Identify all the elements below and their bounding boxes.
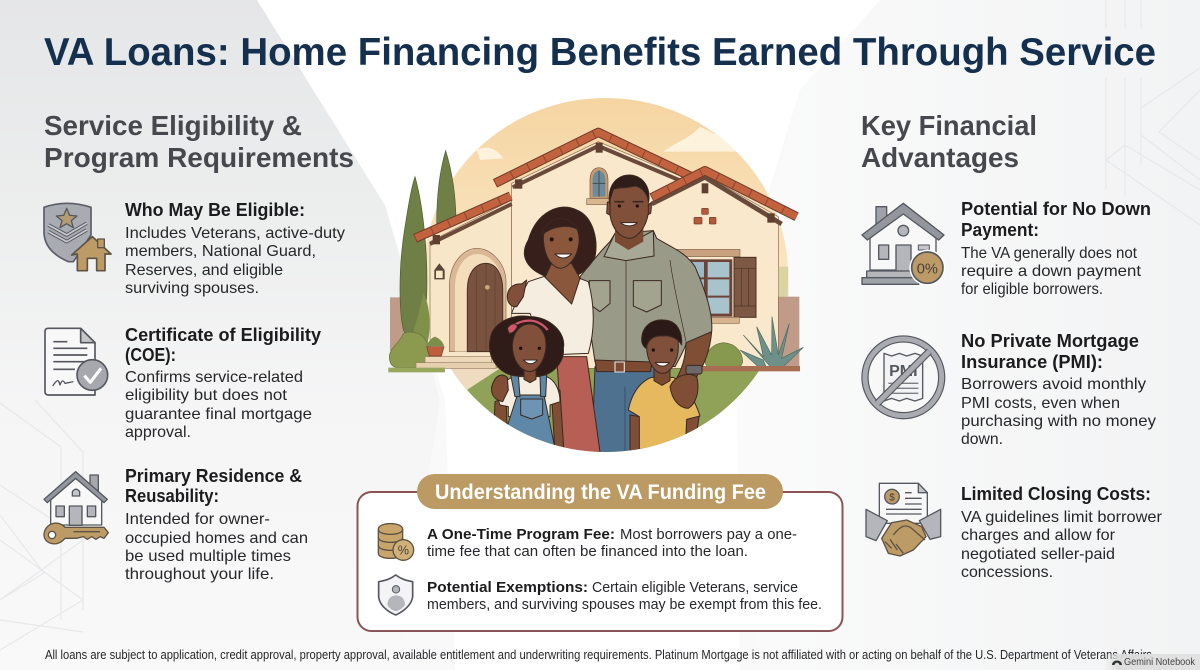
item: certificate of eligibility: Certificate of Eligibility bbox=[125, 325, 321, 345]
wall lantern bbox=[434, 263, 445, 279]
item: limited closing costs: concessions. bbox=[961, 564, 1053, 581]
heading: right column: Advantages bbox=[861, 142, 1019, 173]
heading pill bbox=[417, 474, 783, 509]
vent bricks bbox=[694, 208, 716, 224]
panel: understanding the VA funding fee bbox=[358, 474, 842, 631]
icon: house and key bbox=[44, 472, 108, 544]
item: certificate of eligibility: (COE): bbox=[125, 345, 176, 365]
arched door bbox=[449, 248, 506, 352]
icon: shield with person bbox=[379, 575, 413, 615]
item: certificate of eligibility: eligibility but does not bbox=[125, 387, 288, 404]
item: no private mortgage insurance: Insurance (PMI): bbox=[961, 352, 1103, 372]
item: primary residence and reusability: Intended for owner- bbox=[125, 511, 270, 528]
item: primary residence and reusability: throughout your life. bbox=[125, 566, 274, 583]
item: who may be eligible: Reserves, and eligible bbox=[125, 262, 283, 279]
front window bbox=[677, 249, 756, 323]
sky circle bbox=[413, 97, 797, 457]
item: limited closing costs: negotiated seller-paid bbox=[961, 546, 1115, 563]
item: who may be eligible bbox=[44, 200, 345, 297]
item: primary residence and reusability bbox=[44, 466, 308, 583]
panel: key financial advantages bbox=[861, 110, 1163, 581]
icon: crossed out PMI receipt: PMI bbox=[889, 363, 918, 380]
icon: handshake and document bbox=[866, 483, 941, 556]
item: no private mortgage insurance bbox=[865, 331, 1156, 448]
item: potential exemptions: Potential Exemptions: bbox=[427, 579, 588, 596]
cypress trees bbox=[400, 151, 456, 335]
item: potential exemptions: members, and surviving spouses may be exempt from this fee. bbox=[427, 596, 822, 613]
item: no private mortgage insurance: purchasing with no money bbox=[961, 413, 1156, 430]
item: one-time program fee bbox=[378, 524, 797, 560]
item: certificate of eligibility: guarantee final mortgage bbox=[125, 406, 312, 423]
item: potential for no down payment: require a down payment bbox=[961, 263, 1142, 280]
panel: service eligibility and program requirements bbox=[44, 110, 354, 583]
icon: crossed out PMI receipt bbox=[865, 339, 942, 416]
item: no private mortgage insurance: No Private Mortgage bbox=[961, 331, 1139, 351]
item: potential exemptions: Certain eligible Veterans, service bbox=[592, 579, 798, 596]
item: certificate of eligibility bbox=[45, 325, 321, 441]
item: limited closing costs bbox=[866, 483, 1163, 581]
icon: house with zero percent badge bbox=[862, 203, 945, 286]
watermark: Gemini Notebook bbox=[1104, 654, 1200, 670]
heading pill: Understanding the VA Funding Fee bbox=[435, 481, 766, 504]
attic window bbox=[587, 168, 612, 205]
icon: military shield and home bbox=[44, 203, 111, 271]
icon: handshake and document: $ bbox=[889, 492, 895, 503]
fences bbox=[390, 297, 799, 367]
item: potential for no down payment: Potential for No Down bbox=[961, 199, 1151, 219]
item: potential for no down payment: Payment: bbox=[961, 220, 1039, 240]
shrubs and pot bbox=[389, 267, 788, 368]
item: primary residence and reusability: occupied homes and can bbox=[125, 530, 308, 547]
item: primary residence and reusability: Reusability: bbox=[125, 486, 219, 506]
girl bbox=[489, 316, 564, 453]
heading: left column: Service Eligibility & bbox=[44, 110, 302, 141]
family bbox=[489, 175, 712, 457]
item: limited closing costs: Limited Closing Costs: bbox=[961, 484, 1151, 504]
heading: left column: Program Requirements bbox=[44, 142, 354, 173]
title: VA Loans: Home Financing Benefits Earned Through Service bbox=[44, 31, 1156, 74]
icon: coins with percent bbox=[378, 524, 414, 560]
item: who may be eligible: Includes Veterans, active-duty bbox=[125, 225, 345, 242]
roofs bbox=[415, 132, 797, 244]
watermark: Gemini Notebook: Gemini Notebook bbox=[1124, 657, 1196, 668]
item: who may be eligible: members, National Guard, bbox=[125, 243, 316, 260]
mother bbox=[507, 207, 601, 457]
house walls bbox=[430, 200, 512, 363]
heading: right column bbox=[861, 110, 1037, 173]
item: limited closing costs: VA guidelines limit borrower bbox=[961, 509, 1163, 526]
item: no private mortgage insurance: down. bbox=[961, 431, 1003, 448]
heading: left column bbox=[44, 110, 354, 173]
item: potential for no down payment: for eligible borrowers. bbox=[961, 281, 1103, 298]
item: who may be eligible: surviving spouses. bbox=[125, 280, 259, 297]
item: primary residence and reusability: Primary Residence & bbox=[125, 466, 302, 486]
item: potential for no down payment bbox=[862, 199, 1151, 298]
item: certificate of eligibility: approval. bbox=[125, 424, 191, 441]
item: one-time program fee: A One-Time Program Fee: bbox=[427, 526, 615, 543]
icon: document with check mark bbox=[45, 328, 108, 395]
illustration: family in front of home bbox=[388, 97, 803, 457]
heading: right column: Key Financial bbox=[861, 110, 1037, 141]
item: potential exemptions bbox=[379, 575, 822, 615]
item: primary residence and reusability: be used multiple times bbox=[125, 548, 291, 565]
icon: house with zero percent badge: 0% bbox=[917, 261, 938, 277]
item: certificate of eligibility: Confirms service-related bbox=[125, 369, 303, 386]
item: one-time program fee: Most borrowers pay a one- bbox=[620, 526, 797, 543]
icon: coins with percent: % bbox=[398, 544, 409, 558]
item: limited closing costs: charges and allow for bbox=[961, 527, 1116, 544]
item: potential for no down payment: The VA generally does not bbox=[961, 245, 1138, 262]
item: one-time program fee: time fee that can often be financed into the loan. bbox=[427, 543, 748, 560]
father bbox=[580, 175, 712, 457]
agave and shrub bbox=[388, 317, 803, 372]
item: no private mortgage insurance: PMI costs, even when bbox=[961, 395, 1120, 412]
item: who may be eligible: Who May Be Eligible: bbox=[125, 200, 305, 220]
item: no private mortgage insurance: Borrowers avoid monthly bbox=[961, 376, 1146, 393]
boy bbox=[628, 320, 700, 457]
